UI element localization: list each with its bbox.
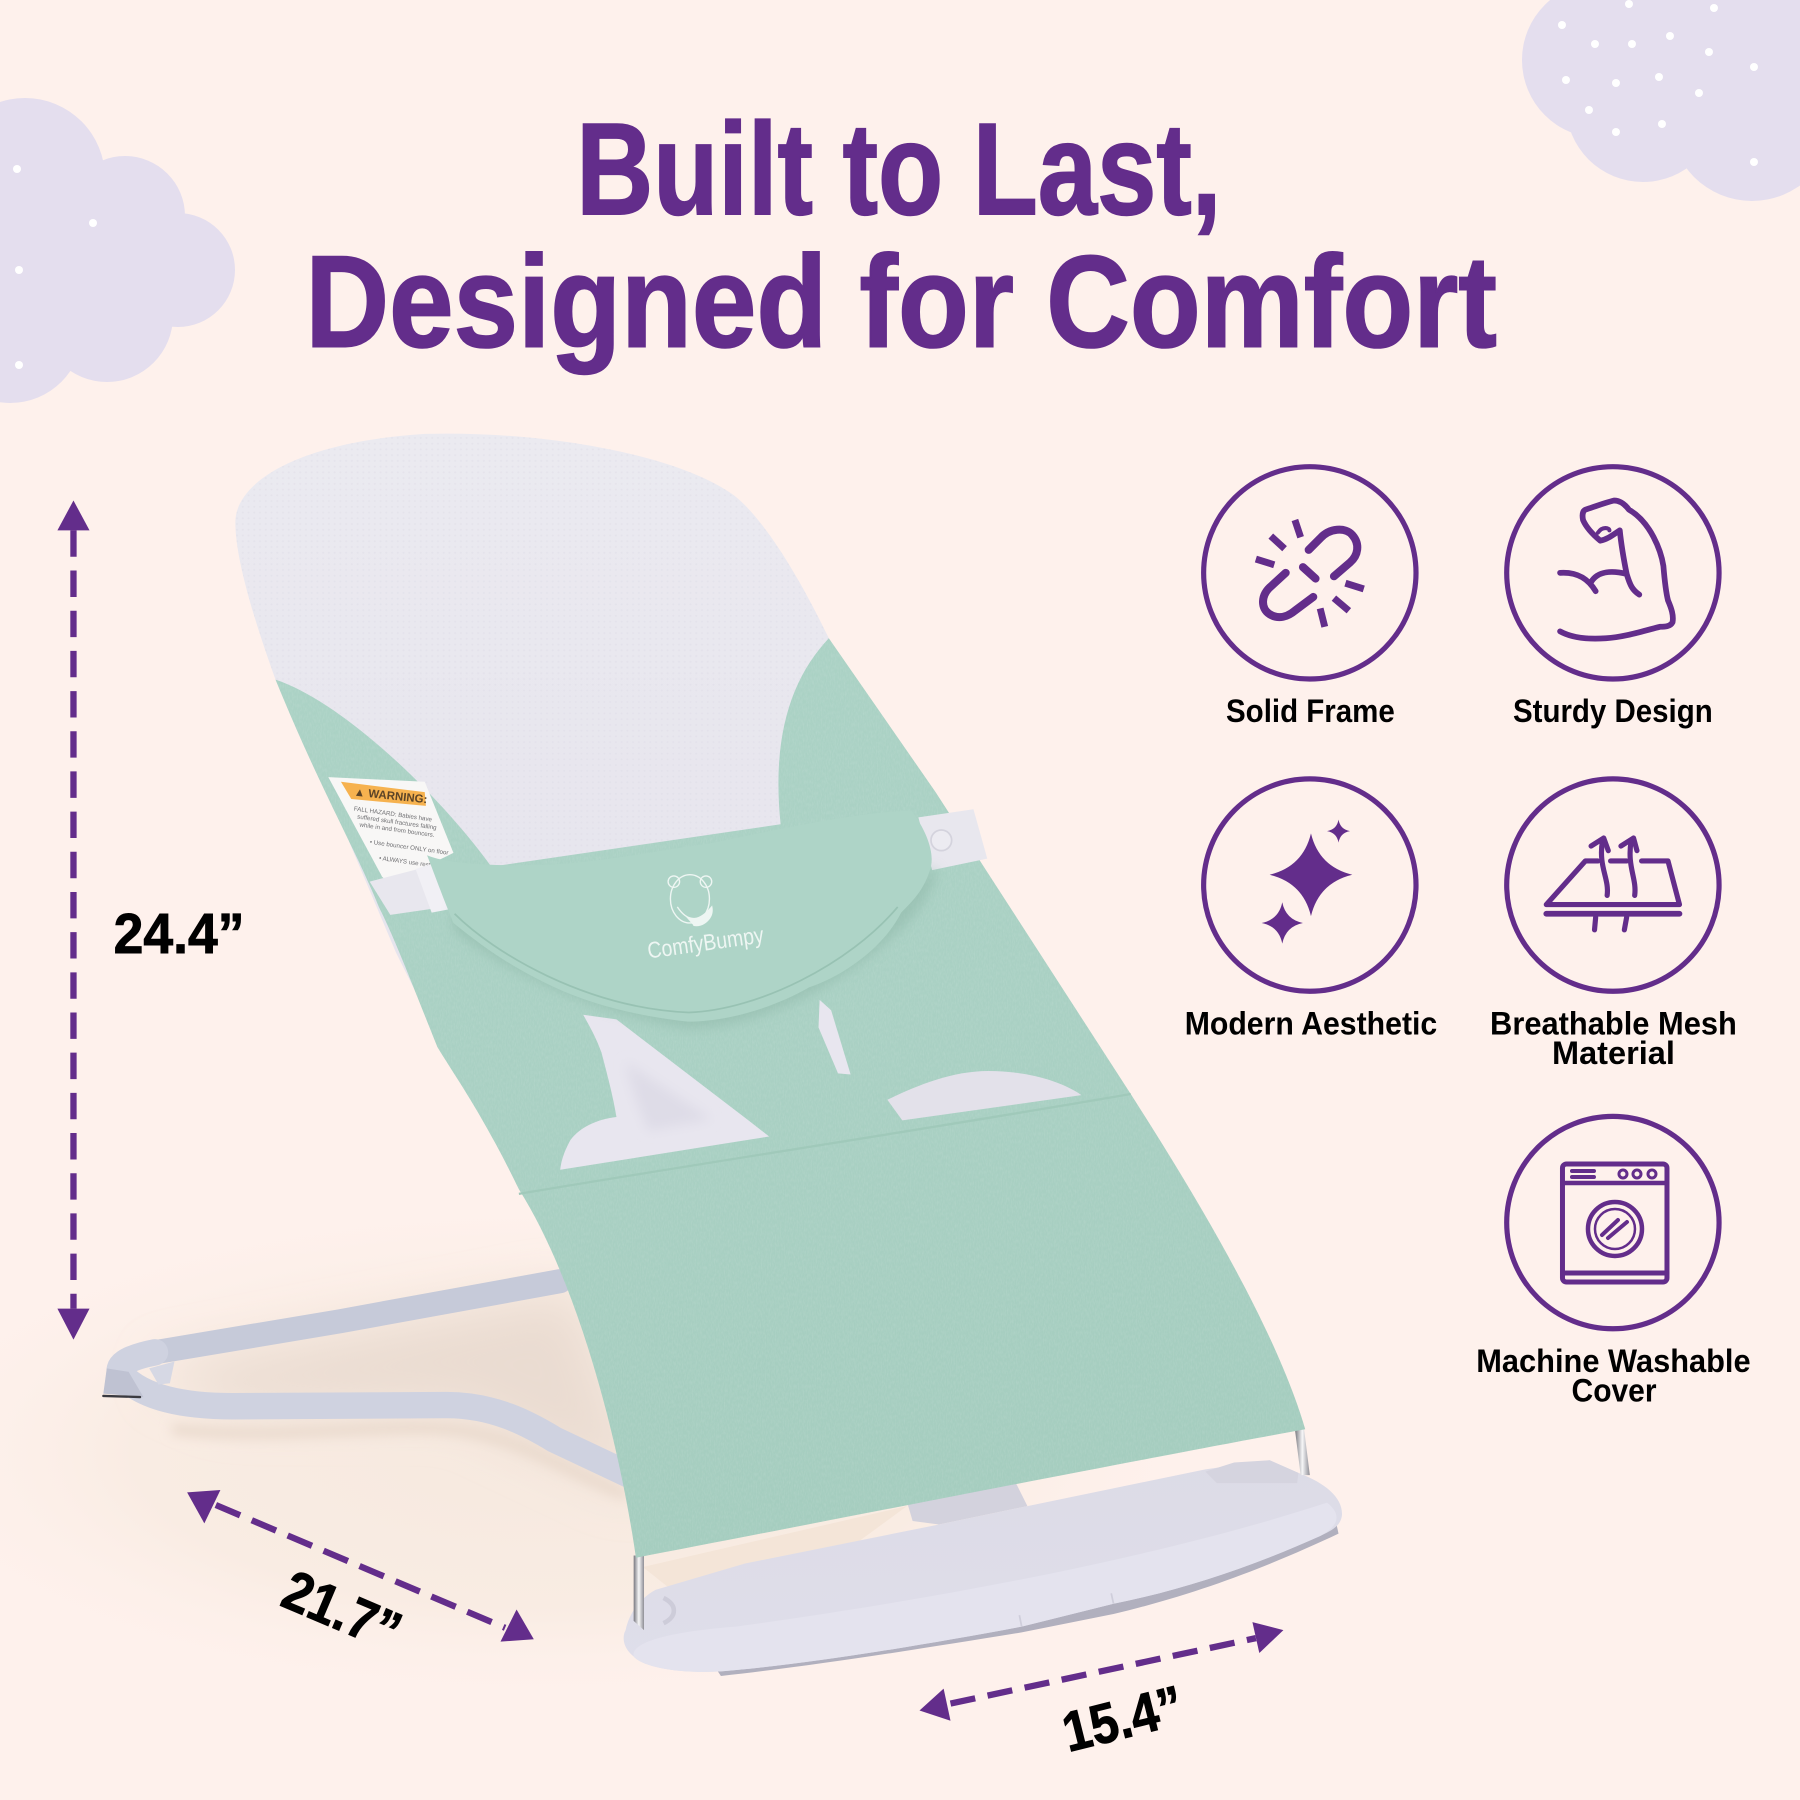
logo: ComfyBumpy [646, 875, 766, 963]
mesh texture [235, 434, 829, 872]
label [1476, 1343, 1751, 1409]
dimension arrow: depth [187, 1490, 534, 1642]
icon: washing machine [1507, 1116, 1719, 1329]
warning label [328, 777, 453, 884]
label: height: 24.4” [114, 902, 245, 965]
head pad [427, 810, 932, 1022]
label [1490, 1005, 1737, 1071]
mechanism [907, 1472, 1027, 1524]
fabric texture [276, 638, 1305, 1558]
title: Built to Last, [576, 96, 1221, 242]
icon: mesh with airflow [1507, 779, 1719, 991]
head pad shadow [453, 867, 937, 1029]
left buckle strap [370, 863, 450, 915]
dimension arrow: height [57, 501, 90, 1340]
label: Modern Aesthetic [1185, 1005, 1437, 1041]
base tray [624, 1460, 1342, 1676]
label: Solid Frame [1226, 693, 1395, 729]
warning label: • Use bouncer ONLY on floor [369, 839, 449, 857]
label: Sturdy Design [1513, 693, 1713, 729]
dimension arrow: width [920, 1622, 1283, 1721]
label: Machine Washable [1476, 1343, 1751, 1379]
feature: solid frame [1204, 467, 1416, 729]
mesh cut-out: right slit [818, 1000, 851, 1074]
metal rods [634, 1429, 1310, 1630]
title: Designed for Comfort [305, 229, 1497, 375]
feature: modern aesthetic [1185, 779, 1437, 1041]
title [305, 96, 1497, 375]
fabric seat [276, 638, 1305, 1558]
icon: sparkles [1204, 779, 1416, 991]
head pad stitching [455, 907, 898, 1012]
label: width: 15.4” [1056, 1673, 1189, 1764]
icon: broken link [1204, 467, 1416, 679]
warning label: suffered skull fractures falling [357, 814, 438, 832]
floor shadow [0, 1194, 1217, 1710]
warning label: ▲ WARNING: [353, 787, 428, 806]
bouncer product illustration [103, 434, 1342, 1676]
label: Cover [1572, 1373, 1657, 1409]
feature: sturdy design [1507, 467, 1719, 729]
cloud: top right [1522, 0, 1800, 201]
mesh cut-out: left [560, 1015, 769, 1170]
right buckle strap [918, 809, 987, 870]
cloud: top left [0, 98, 235, 403]
pocket seam [519, 1094, 1131, 1194]
warning label: while in and from bouncers. [358, 821, 435, 839]
warning label: • ALWAYS use restraints [379, 855, 446, 871]
icon: flexed arm [1507, 467, 1719, 679]
feature: machine washable [1476, 1116, 1751, 1409]
label: depth: 21.7” [274, 1558, 410, 1663]
warning label: FALL HAZARD: Babies have [353, 806, 433, 823]
mesh cut-out: right bump [887, 1071, 1081, 1120]
feature: breathable mesh [1490, 779, 1737, 1071]
label: Breathable Mesh [1490, 1005, 1737, 1041]
label: Material [1552, 1035, 1675, 1071]
frame tube [103, 1281, 637, 1479]
logo: ComfyBumpy: ComfyBumpy [646, 921, 766, 963]
mesh backing [235, 434, 987, 1182]
